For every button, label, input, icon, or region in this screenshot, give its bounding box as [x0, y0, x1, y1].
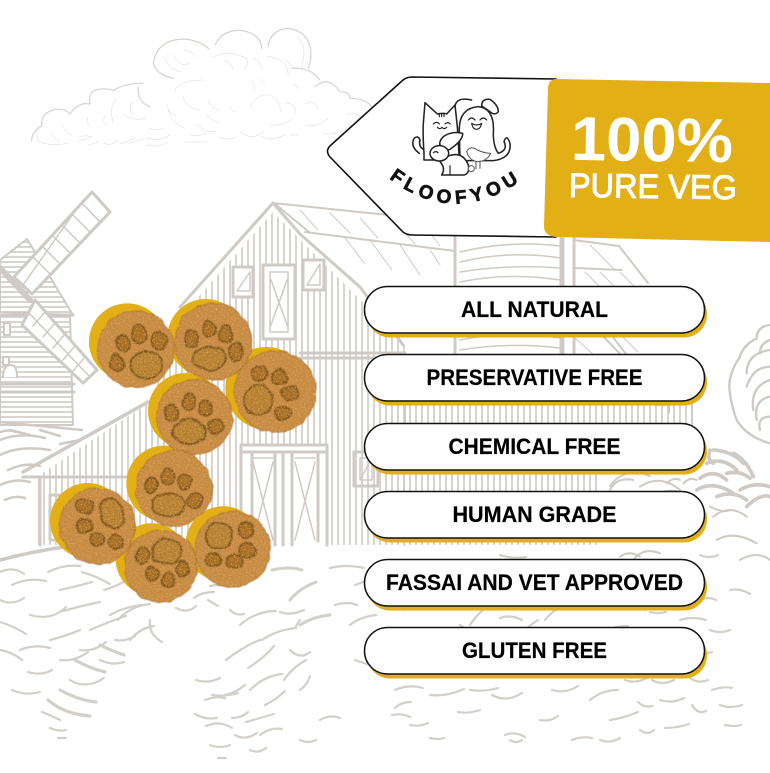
icon: cat, dog, rabbit and bird logo — [413, 99, 510, 175]
background: windmill — [0, 192, 110, 500]
pill: gluten free: GLUTEN FREE — [462, 638, 607, 663]
paw cookies — [60, 303, 316, 602]
background: cloud — [32, 28, 372, 146]
pill: human grade: HUMAN GRADE — [452, 502, 616, 527]
pill: chemical free — [364, 424, 707, 474]
pill: chemical free: CHEMICAL FREE — [448, 434, 620, 459]
badge: 100% pure veg — [544, 79, 770, 242]
pill: all natural: ALL NATURAL — [461, 297, 608, 322]
pill: fassai and vet approved — [364, 560, 707, 610]
background: barn and silo — [0, 203, 692, 560]
pill: human grade — [364, 492, 707, 542]
pill: preservative free — [364, 354, 707, 406]
pill: preservative free: PRESERVATIVE FREE — [426, 365, 642, 390]
badge heading: 100% — [571, 105, 733, 176]
logo wordmark: FLOOFYOU — [390, 168, 517, 204]
benefits list — [364, 286, 707, 678]
background: trees — [610, 325, 770, 560]
pill: fassai and vet approved: FASSAI AND VET APPROVED — [386, 570, 683, 595]
logo tag — [326, 76, 557, 238]
background: field furrows — [0, 555, 750, 758]
cookies: paw print treats — [50, 299, 316, 602]
pill: gluten free — [364, 628, 707, 678]
gold badge panel — [544, 79, 770, 242]
tag outline — [328, 77, 556, 237]
badge subheading: PURE VEG — [569, 167, 737, 207]
gold backing shapes — [50, 299, 308, 595]
pill: all natural — [364, 286, 707, 338]
